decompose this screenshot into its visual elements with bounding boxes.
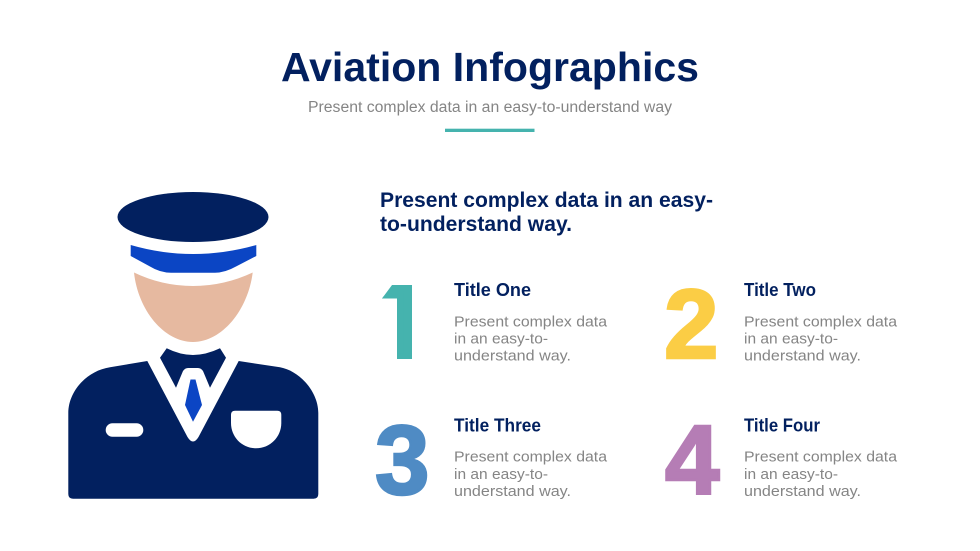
icon: name badge [106, 423, 143, 437]
heading: to-understand way. [380, 213, 572, 236]
icon: collar [160, 348, 226, 388]
item four text: understand way. [744, 483, 861, 500]
icon: pocket [231, 411, 281, 448]
icon: tie [185, 380, 202, 422]
item two text [744, 314, 898, 364]
item four [665, 405, 898, 515]
item three title: Title Three [454, 416, 541, 436]
number 3: 3 [375, 405, 430, 515]
subtitle: Present complex data in an easy-to-understand way [308, 99, 672, 116]
item two text: in an easy-to- [744, 330, 838, 348]
item four text: in an easy-to- [744, 466, 838, 483]
number 1: 1 [374, 264, 433, 382]
item one title: Title One [454, 280, 531, 300]
item four title: Title Four [744, 416, 820, 436]
item one text: in an easy-to- [454, 330, 548, 348]
item three text: understand way. [454, 483, 571, 500]
title: Aviation Infographics [281, 44, 699, 90]
item two text: Present complex data [744, 314, 898, 330]
icon: pilot figure [68, 192, 318, 499]
number 2: 2 [664, 269, 719, 379]
item four text: Present complex data [744, 448, 898, 466]
icon: cap band [131, 245, 256, 273]
icon: cap top [118, 192, 268, 242]
item three text: in an easy-to- [454, 466, 548, 483]
item three text [454, 448, 608, 500]
item one text: understand way. [454, 348, 571, 364]
item two text: understand way. [744, 348, 861, 364]
item one text [454, 314, 608, 364]
title accent line [445, 129, 534, 132]
number 4: 4 [665, 405, 720, 515]
item one text: Present complex data [454, 314, 608, 330]
item one [382, 282, 608, 364]
heading: Present complex data in an easy- [380, 189, 713, 212]
item three [375, 405, 608, 515]
item four text [744, 448, 898, 500]
icon: face [134, 272, 253, 342]
item two [664, 269, 898, 379]
item three text: Present complex data [454, 448, 608, 466]
item two title: Title Two [744, 280, 816, 300]
icon: jacket [68, 361, 318, 499]
heading [380, 189, 713, 236]
